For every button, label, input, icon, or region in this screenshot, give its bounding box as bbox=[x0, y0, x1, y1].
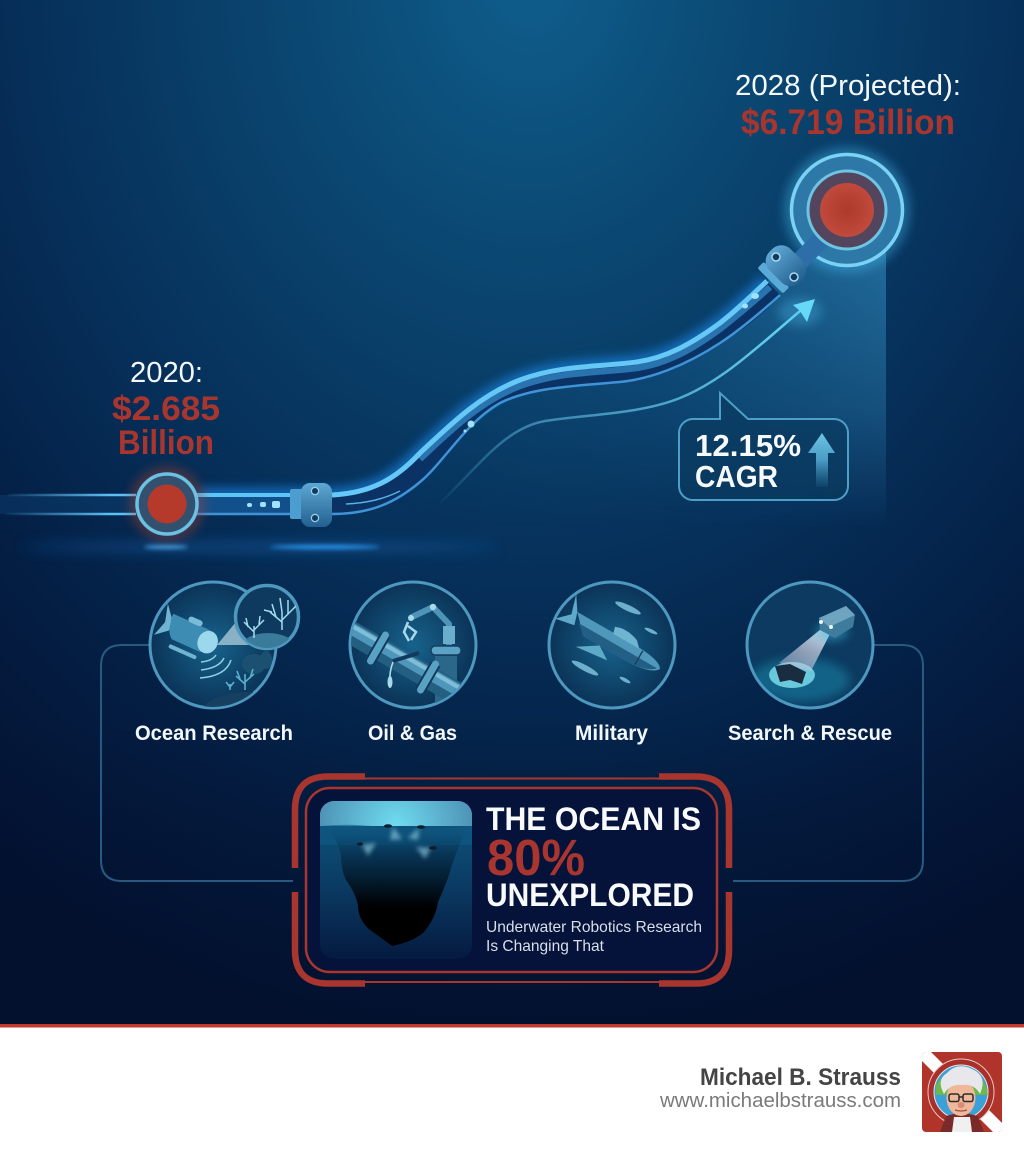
arrow: CAGR trend bbox=[440, 298, 822, 503]
label: 2028 value bbox=[735, 70, 961, 142]
label: ocean research: Ocean Research bbox=[135, 722, 293, 745]
panel subtext bbox=[486, 919, 702, 955]
panel headline: THE OCEAN IS bbox=[486, 801, 701, 837]
label: 2020 value: 2020: bbox=[130, 357, 203, 389]
icon: oil and gas bbox=[340, 582, 476, 708]
ROV lights bbox=[357, 824, 437, 859]
pipe flow dots bbox=[247, 293, 759, 508]
panel: ocean 80% unexplored: UNEXPLORED bbox=[486, 877, 694, 913]
wellhead and robot arm bbox=[435, 656, 457, 706]
pipe glow bbox=[200, 281, 767, 495]
pipeline bbox=[351, 622, 462, 699]
pipe connector lower bbox=[290, 483, 332, 527]
icon: ocean research bbox=[148, 580, 300, 710]
footer bbox=[0, 1024, 1024, 1132]
pipe growth line bbox=[0, 281, 780, 514]
panel subtext: Is Changing That bbox=[486, 938, 605, 955]
logo bbox=[922, 1052, 1002, 1132]
callout: CAGR bbox=[679, 393, 848, 500]
magnifier inset bbox=[236, 586, 298, 648]
light cone bbox=[217, 624, 249, 645]
pipe top highlight bbox=[332, 281, 767, 495]
iceberg image bbox=[320, 801, 472, 959]
panel frame bbox=[295, 776, 729, 984]
connector lines bbox=[101, 645, 923, 881]
horizon glow bbox=[20, 543, 500, 551]
label: 2020 value: $2.685 bbox=[112, 390, 220, 428]
seabed bbox=[204, 692, 254, 707]
panel: ocean 80% unexplored bbox=[295, 776, 729, 984]
icon: search and rescue bbox=[747, 582, 873, 708]
inspection tool bbox=[393, 653, 419, 661]
label: 2020 value: Billion bbox=[118, 424, 214, 462]
torpedo bbox=[556, 595, 660, 670]
shaded area under growth curve bbox=[564, 252, 886, 502]
label: 2028 value: $6.719 Billion bbox=[741, 103, 955, 142]
pipe body bbox=[332, 281, 780, 514]
ROV bbox=[816, 624, 848, 640]
icon: up arrow bbox=[808, 433, 835, 487]
callout: CAGR: CAGR bbox=[695, 459, 778, 494]
icon: military bbox=[548, 582, 675, 708]
panel subtext: Underwater Robotics Research bbox=[486, 919, 702, 936]
sonar arcs bbox=[200, 655, 231, 678]
author website: www.michaelbstrauss.com bbox=[659, 1090, 901, 1112]
pipe bottom line bbox=[332, 295, 780, 514]
callout: CAGR: 12.15% bbox=[695, 428, 801, 463]
search beam bbox=[779, 630, 830, 671]
label: oil and gas: Oil & Gas bbox=[368, 722, 457, 745]
left horizontal pipe bbox=[196, 495, 292, 514]
node: 2020 bbox=[129, 466, 205, 542]
pipe connector upper bbox=[755, 240, 812, 296]
node: 2028 bbox=[784, 147, 910, 276]
panel: ocean 80% unexplored: 80% bbox=[487, 829, 585, 886]
author name: Michael B. Strauss bbox=[700, 1064, 901, 1091]
AUV bbox=[154, 604, 218, 660]
label: military: Military bbox=[575, 722, 648, 745]
label: 2020 value bbox=[112, 357, 220, 462]
small drones bbox=[570, 599, 658, 684]
label: search and rescue: Search & Rescue bbox=[728, 722, 892, 745]
sunken object bbox=[775, 664, 806, 684]
label: 2028 value: 2028 (Projected): bbox=[735, 70, 961, 102]
